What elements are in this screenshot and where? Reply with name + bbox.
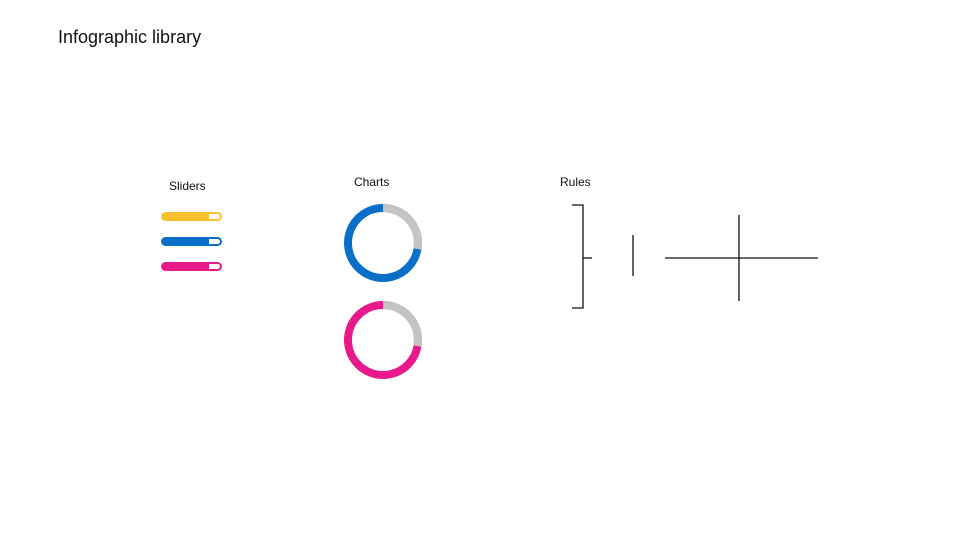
slider: blue [161,237,222,246]
rule: short vertical [632,235,634,276]
heading: rules: Rules [560,175,591,189]
rule: bracket [572,205,592,308]
chart: blue donut [348,208,418,278]
chart: pink donut [348,305,418,375]
title: Infographic library [58,27,201,47]
heading: charts: Charts [354,175,389,189]
slider: pink [161,262,222,271]
rule: cross [665,215,818,301]
slider: yellow [161,212,222,221]
heading: sliders: Sliders [169,179,206,193]
